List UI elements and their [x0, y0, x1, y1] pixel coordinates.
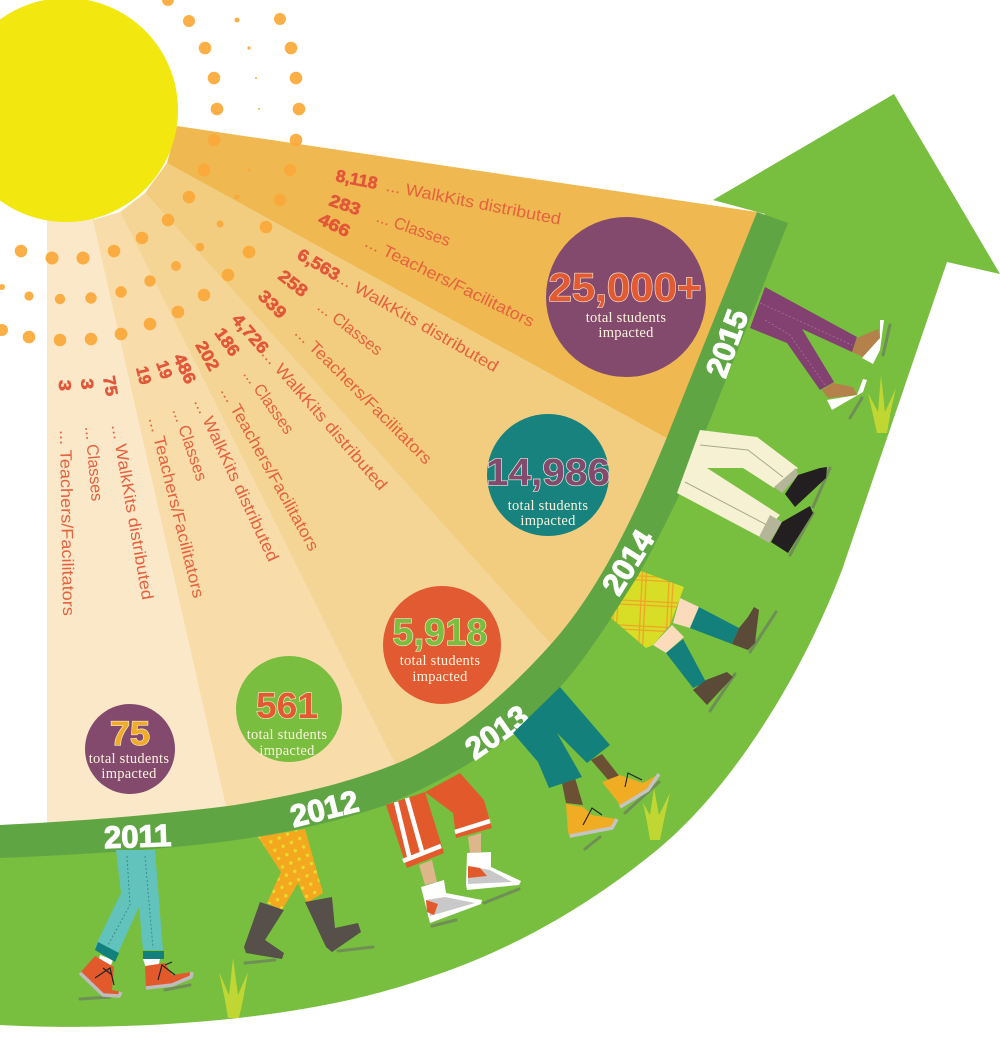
badge 2012: impacted [259, 743, 315, 759]
badge 2011: 75 [110, 715, 150, 753]
row: classes 2013: ... Classes [239, 366, 297, 438]
row: WalkKits 2013 [228, 310, 391, 494]
badge 2013: 5,918 [392, 612, 488, 654]
row: teachers 2014: 339 [254, 286, 290, 322]
row: WalkKits 2015 [334, 166, 563, 229]
sun [0, 0, 178, 222]
badge 2011: impacted [101, 766, 157, 782]
badge 2014 [486, 414, 610, 536]
badge 2012 [236, 656, 342, 762]
badge 2015 [546, 217, 706, 377]
row: teachers 2011 [55, 380, 78, 616]
grass [643, 788, 670, 840]
stats 2014 [254, 245, 502, 468]
sun dots [0, 0, 305, 346]
row: WalkKits 2015: ... WalkKits distributed [384, 177, 562, 229]
badge 2014: total students [508, 498, 588, 514]
row: WalkKits 2011: ... WalkKits distributed [108, 423, 156, 601]
badge 2015: 25,000+ [548, 266, 702, 310]
badge 2011: total students [89, 751, 169, 767]
row: classes 2011: ... Classes [81, 426, 106, 502]
stats 2011 [55, 374, 157, 616]
badge 2012: total students [247, 727, 327, 743]
row: classes 2012: 19 [152, 358, 176, 381]
row: classes 2011 [77, 378, 107, 502]
legs 2011: teal jeans and orange sneakers [80, 850, 192, 999]
row: classes 2015 [327, 191, 453, 250]
row: classes 2015: 283 [327, 191, 363, 219]
timeline band [0, 212, 788, 858]
row: classes 2011: 3 [77, 378, 97, 390]
row: classes 2013 [211, 324, 298, 438]
row: WalkKits 2015: 8,118 [334, 166, 379, 193]
legs 2013: teal shorts and yellow sneakers [513, 687, 659, 849]
row: classes 2015: ... Classes [374, 208, 453, 250]
row: WalkKits 2011: 75 [99, 374, 121, 397]
row: teachers 2015 [315, 210, 537, 331]
row: teachers 2012: 19 [132, 364, 155, 386]
row: teachers 2014 [254, 286, 436, 468]
row: WalkKits 2013: 4,726 [228, 310, 272, 357]
grass [868, 375, 896, 433]
badge 2015: impacted [598, 325, 654, 341]
badge 2013 [383, 586, 501, 704]
row: classes 2012 [152, 358, 211, 483]
year 2015: 2015 [699, 305, 755, 382]
row: classes 2014: ... Classes [314, 298, 386, 359]
year 2012: 2012 [287, 783, 362, 834]
row: WalkKits 2012 [169, 351, 283, 564]
row: teachers 2014: ... Teachers/Facilitators [291, 324, 435, 468]
row: teachers 2013: ... Teachers/Facilitators [217, 384, 322, 554]
legs 2015: purple trousers and white flats [750, 287, 890, 418]
row: teachers 2012 [132, 364, 208, 600]
wedge 2012 [93, 212, 398, 815]
row: WalkKits 2013: ... WalkKits distributed [258, 345, 390, 494]
year 2014: 2014 [595, 523, 662, 601]
legs 2014b: cream trousers and black boots [677, 430, 830, 555]
year 2011: 2011 [103, 818, 172, 855]
stats 2012 [132, 351, 283, 600]
badge 2012: 561 [256, 685, 318, 726]
badge 2015: total students [586, 310, 666, 326]
row: WalkKits 2012: ... WalkKits distributed [190, 395, 282, 564]
legs 2012b: orange track shorts and high tops [386, 773, 521, 926]
year 2013: 2013 [459, 698, 535, 767]
wedge 2013 [120, 193, 556, 770]
sun rays fan [47, 126, 757, 832]
wedge 2015 [167, 126, 757, 440]
stats 2013 [192, 310, 391, 554]
row: WalkKits 2014: ... WalkKits distributed [333, 268, 501, 376]
row: WalkKits 2014: 6,563 [294, 245, 343, 284]
row: WalkKits 2012: 486 [169, 351, 200, 387]
row: classes 2013: 186 [211, 324, 243, 360]
legs 2012: polka tights and boots [244, 829, 373, 963]
row: WalkKits 2011 [99, 374, 157, 601]
row: WalkKits 2014 [294, 245, 502, 376]
row: classes 2014 [275, 266, 386, 359]
row: classes 2012: ... Classes [168, 406, 210, 483]
row: classes 2014: 258 [275, 266, 311, 301]
stats 2015 [315, 166, 563, 331]
badge 2014: impacted [520, 513, 576, 529]
badge 2014: 14,986 [486, 452, 610, 494]
badge 2013: impacted [412, 669, 468, 685]
wedge 2011 [47, 215, 228, 832]
wedge 2014 [145, 163, 670, 650]
row: teachers 2011: 3 [55, 380, 74, 391]
row: teachers 2013 [192, 338, 323, 554]
legs 2014a: plaid shorts and teal socks [611, 571, 776, 711]
grass [219, 958, 248, 1018]
row: teachers 2013: 202 [192, 338, 223, 374]
badge 2013: total students [400, 653, 480, 669]
badge 2011 [85, 704, 175, 794]
row: teachers 2015: ... Teachers/Facilitators [362, 233, 537, 331]
row: teachers 2011: ... Teachers/Facilitators [56, 430, 77, 616]
row: teachers 2012: ... Teachers/Facilitators [145, 415, 207, 600]
row: teachers 2015: 466 [315, 210, 353, 241]
